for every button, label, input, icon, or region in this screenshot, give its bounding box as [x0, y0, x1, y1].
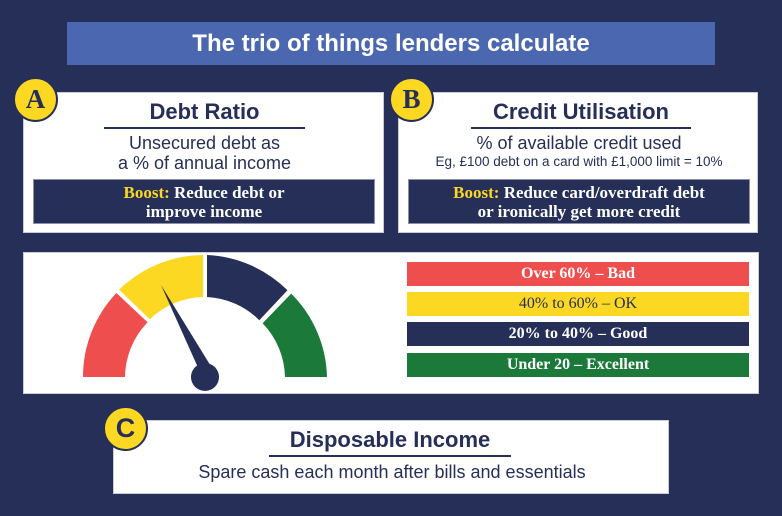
text: definition: % of available credit used: [476, 133, 682, 153]
panel: C disposable income: [113, 420, 669, 494]
gauge segment green: [263, 294, 327, 377]
badge B: B: [402, 84, 420, 114]
bar: good: 20% to 40% – Good: [509, 325, 647, 342]
bar: excellent: Under 20 – Excellent: [507, 356, 649, 373]
bar: excellent: [407, 353, 749, 377]
boost box: Boost: Reduce debt or: [123, 183, 284, 202]
bar: good: [407, 322, 749, 346]
text: example: Eg, £100 debt on a card with £1,000 limit = 10%: [435, 154, 723, 169]
badge B: [389, 77, 434, 122]
panel: gauge and scale: [23, 252, 759, 394]
heading: Disposable Income: [269, 425, 511, 457]
gauge segment navy: [207, 255, 288, 320]
badge A: A: [26, 84, 45, 114]
boost box: [408, 179, 750, 224]
bar: ok: [407, 292, 749, 316]
title: [67, 22, 715, 65]
panel: A debt ratio: [23, 92, 384, 233]
bar: ok: 40% to 60% – OK: [519, 295, 637, 312]
text: definition: Unsecured debt as: [129, 133, 280, 153]
heading: Disposable Income: Disposable Income: [290, 427, 490, 452]
scale bars: [407, 262, 749, 377]
gauge segment yellow: [119, 255, 203, 319]
bar: bad: Over 60% – Bad: [521, 265, 635, 282]
bar: bad: [407, 262, 749, 286]
text: definition: [118, 133, 291, 173]
heading: Credit Utilisation: Credit Utilisation: [493, 99, 669, 124]
heading: Debt Ratio: [104, 97, 305, 129]
badge C: [103, 406, 148, 451]
badge C: C: [116, 413, 135, 443]
needle: [161, 285, 212, 372]
title: The trio of things lenders calculate: [192, 30, 590, 57]
text: definition: a % of annual income: [118, 153, 291, 173]
boost box: [33, 179, 375, 224]
boost box: or ironically get more credit: [478, 202, 680, 221]
text: definition: Spare cash each month after bills and essentials: [198, 462, 586, 482]
boost box: Boost: Reduce card/overdraft debt: [453, 183, 705, 202]
boost box: improve income: [146, 202, 262, 221]
badge A: [13, 77, 58, 122]
heading: Credit Utilisation: [471, 97, 691, 129]
panel: B credit utilisation: [398, 92, 758, 233]
heading: Debt Ratio: Debt Ratio: [150, 99, 260, 124]
gauge segment red: [83, 293, 148, 377]
